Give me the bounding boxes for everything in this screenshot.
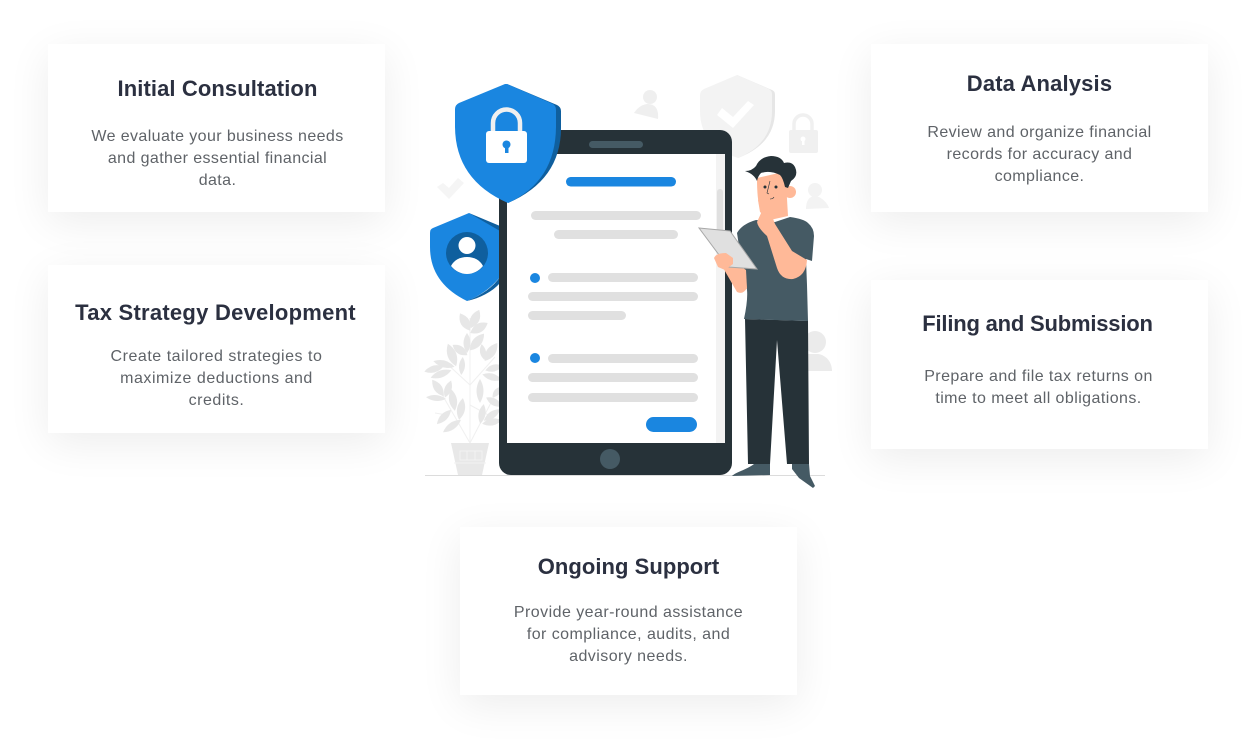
tablet held by man <box>699 228 757 269</box>
heading: Ongoing Support: Ongoing Support <box>538 554 719 579</box>
text: Tax Strategy Development description: credits. <box>189 392 244 409</box>
heading: Filing and Submission: Filing and Submission <box>922 311 1153 336</box>
icon: grey background padlock <box>789 115 818 153</box>
icon: grey background person right <box>806 183 829 209</box>
left arm <box>722 263 747 293</box>
screen form content <box>528 177 701 432</box>
text: Ongoing Support description: advisory needs. <box>569 648 688 665</box>
text: Filing and Submission description: time to meet all obligations. <box>935 390 1142 407</box>
text: Ongoing Support description: Provide year-round assistance <box>514 604 743 621</box>
text: Tax Strategy Development description: Create tailored strategies to <box>111 348 322 365</box>
text: Data Analysis description <box>927 124 1152 185</box>
text: Ongoing Support description <box>514 604 743 665</box>
man character <box>699 156 815 488</box>
left hand <box>714 253 733 270</box>
icon: grey background person <box>634 90 658 119</box>
panel: Filing and Submission <box>871 280 1208 449</box>
panel: Ongoing Support <box>460 527 797 695</box>
heading: Initial Consultation: Initial Consultation <box>118 76 318 101</box>
icon: grey background check mark <box>437 178 464 199</box>
text: Initial Consultation description: data. <box>199 172 236 189</box>
ground line <box>425 475 825 476</box>
text: Initial Consultation description: We evaluate your business needs <box>91 128 344 145</box>
heading: Data Analysis: Data Analysis <box>967 71 1112 96</box>
plant in pot <box>423 308 504 475</box>
heading: Tax Strategy Development: Tax Strategy Development <box>75 300 356 325</box>
text: Tax Strategy Development description <box>111 348 322 409</box>
text: Initial Consultation description <box>91 128 344 189</box>
panel: Initial Consultation <box>48 44 385 212</box>
panel: Data Analysis <box>871 44 1208 212</box>
text: Data Analysis description: compliance. <box>995 168 1084 185</box>
big shield with padlock <box>455 84 561 203</box>
shoes <box>732 464 815 488</box>
icon: grey large person behind man <box>800 331 832 371</box>
text: Ongoing Support description: for compliance, audits, and <box>527 626 730 643</box>
raised arm <box>757 211 807 279</box>
icon: grey background shield with check <box>700 75 775 158</box>
text: Data Analysis description: records for accuracy and <box>947 146 1132 163</box>
hair <box>745 156 796 188</box>
text: Filing and Submission description: Prepare and file tax returns on <box>924 368 1153 385</box>
neck and ear <box>758 182 788 220</box>
face <box>757 172 787 214</box>
legs <box>745 319 809 464</box>
panel: Tax Strategy Development <box>48 265 385 433</box>
text: Data Analysis description: Review and organize financial <box>927 124 1152 141</box>
text: Tax Strategy Development description: maximize deductions and <box>120 370 313 387</box>
tablet device <box>499 130 732 475</box>
text: Filing and Submission description <box>924 368 1153 407</box>
shirt <box>737 217 814 321</box>
facial features <box>764 186 778 188</box>
text: Initial Consultation description: and gather essential financial <box>108 150 327 167</box>
small shield with user <box>430 213 500 301</box>
